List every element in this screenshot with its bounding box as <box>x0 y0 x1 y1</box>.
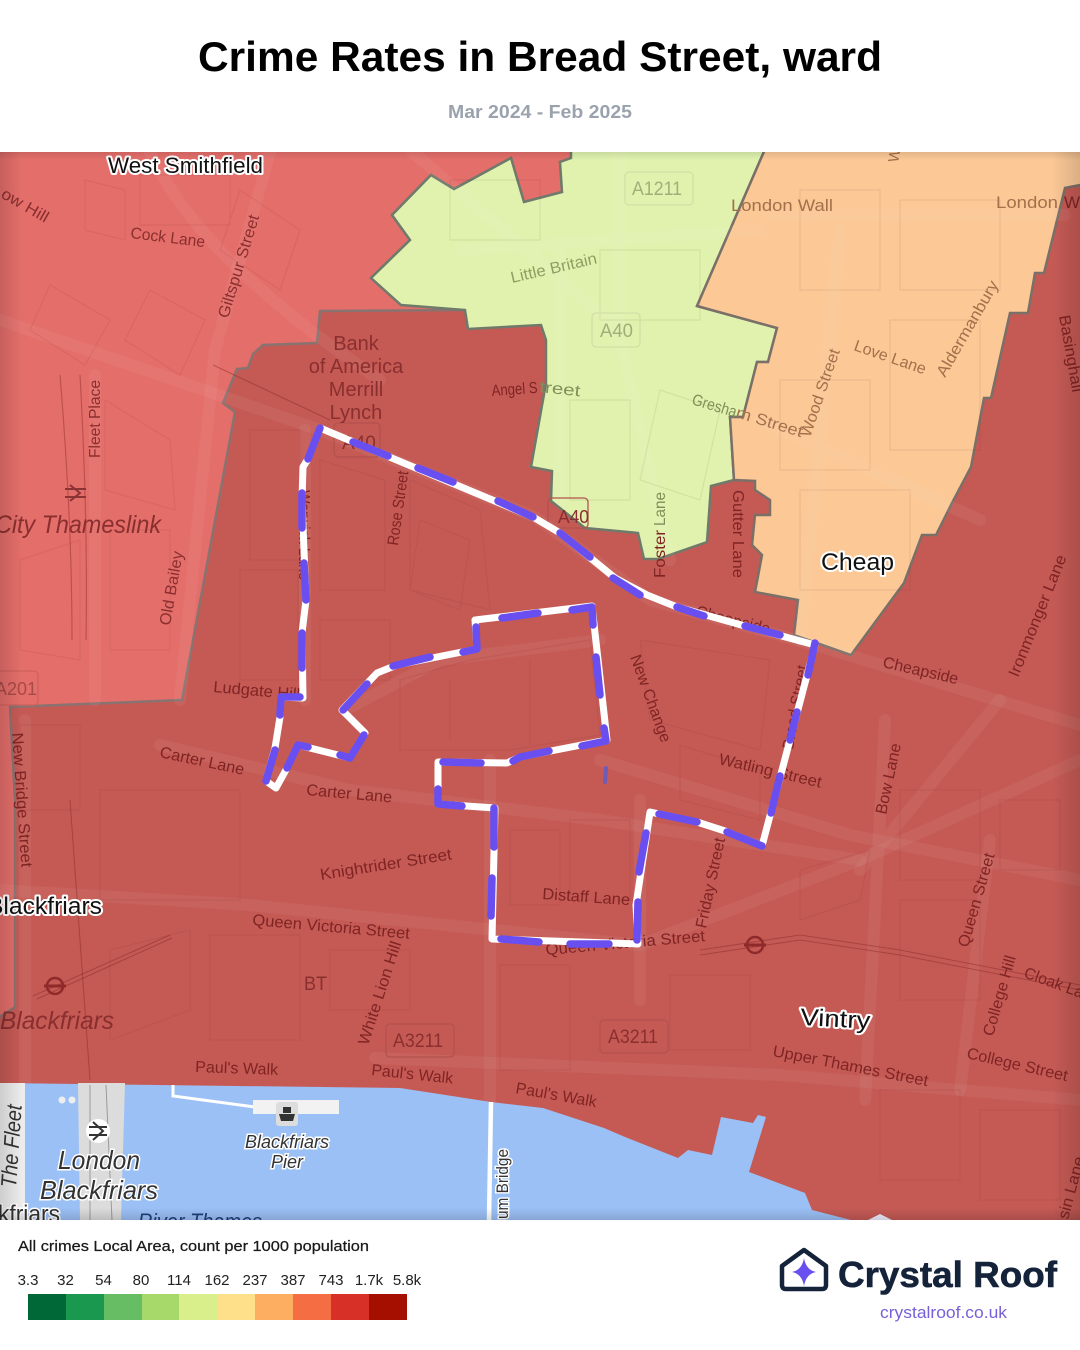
ward region: light green, low crime <box>371 140 777 559</box>
street labels on the map: BT <box>304 974 327 995</box>
street labels on the map: Watling Street <box>717 751 824 792</box>
street labels on the map: City Thameslink <box>0 511 162 539</box>
street labels on the map: Rose Street <box>385 469 412 547</box>
street labels on the map: treet <box>539 379 582 400</box>
street labels on the map <box>0 146 1080 1221</box>
street labels on the map: W <box>885 146 905 164</box>
street labels on the map: W <box>1064 193 1080 212</box>
The Fleet road strip <box>0 1083 25 1223</box>
tube rail lines and station icons <box>33 365 1080 1080</box>
street labels on the map: Ludgate Hill <box>213 679 301 704</box>
legend scale labels: 54 <box>95 1272 112 1289</box>
street labels on the map: Paul's Walk <box>371 1062 455 1088</box>
ward label: West Smithfield: West Smithfield <box>108 153 263 178</box>
street labels on the map: White Lion Hill <box>356 939 405 1047</box>
legend scale labels: 114 <box>167 1272 191 1289</box>
water: River Thames <box>0 1083 851 1220</box>
legend scale labels <box>18 1272 422 1289</box>
street labels on the map: Ironmonger Lane <box>1006 552 1070 679</box>
icon: house with star <box>782 1250 826 1289</box>
street labels on the map: Lynch <box>330 402 382 424</box>
legend scale labels: 387 <box>280 1272 306 1289</box>
Bread Street ward boundary <box>266 428 815 944</box>
street labels on the map: College Hill <box>981 954 1020 1038</box>
ward region: orange, Cheap <box>697 140 1080 655</box>
map edge shading <box>0 152 1080 1220</box>
street labels on the map: Gresha <box>690 392 739 421</box>
street labels on the map: Distaff Lane <box>542 886 631 909</box>
legend scale labels: 1.7k <box>355 1272 384 1289</box>
street labels on the map: Blackfriars <box>0 1007 114 1035</box>
street labels on the map: Cheapside <box>694 603 772 638</box>
street labels on the map: Bank <box>333 333 380 355</box>
legend scale labels: 5.8k <box>393 1272 422 1289</box>
title: Crime Rates in Bread Street, ward <box>198 33 882 80</box>
legend scale labels: 80 <box>133 1272 149 1289</box>
street labels on the map: Knightrider Street <box>319 846 454 884</box>
legend title: All crimes Local Area, count per 1000 population <box>18 1238 369 1255</box>
street labels on the map: m Street <box>734 405 805 441</box>
street labels on the map: Carter Lane <box>158 744 246 779</box>
river side labels <box>0 1104 513 1220</box>
website url: crystalroof.co.uk <box>880 1304 1008 1322</box>
street labels on the map: Aldermanbury <box>934 278 1002 380</box>
street labels on the map: A3211 <box>393 1031 443 1052</box>
street labels on the map: Angel S <box>491 380 538 400</box>
street labels on the map: Fleet Place <box>87 380 104 458</box>
street labels on the map: Foster <box>652 529 669 578</box>
legend scale labels: 237 <box>242 1272 268 1289</box>
river side labels: Pier <box>271 1152 304 1172</box>
street labels on the map: Wood Street <box>798 346 844 439</box>
legend scale labels: 743 <box>318 1272 344 1289</box>
icon: Thameslink rail station <box>65 485 86 501</box>
street labels on the map: College Street <box>965 1045 1070 1085</box>
legend scale labels: 32 <box>57 1272 74 1289</box>
road number signs <box>0 172 693 1057</box>
street labels on the map: Paul's Walk <box>195 1059 279 1079</box>
street labels on the map: Queen Victoria Street <box>545 928 706 959</box>
icon: national rail station <box>86 1119 110 1143</box>
ward label: Vintry: Vintry <box>800 1004 871 1035</box>
street labels on the map: of America <box>309 356 404 378</box>
legend scale labels: 3.3 <box>18 1272 38 1289</box>
street labels on the map: A40 <box>600 321 633 342</box>
street labels on the map: Gutter Lane <box>729 490 746 578</box>
icon: Mansion House underground <box>744 937 766 953</box>
river side labels: um Bridge <box>493 1149 512 1219</box>
boundary: purple dashes <box>266 428 815 944</box>
street labels on the map: A40 <box>558 507 589 527</box>
boundary: white base line <box>266 428 815 944</box>
street labels on the map: Paul's Walk <box>514 1080 599 1111</box>
street labels on the map: Merrill <box>329 379 383 401</box>
street labels on the map: London <box>996 193 1058 212</box>
street labels on the map: Bread Street <box>780 664 812 751</box>
river side labels: Blackfriars <box>245 1132 329 1152</box>
street labels on the map: London Wall <box>731 196 833 215</box>
street labels on the map: New Bridge Street <box>8 732 34 869</box>
street labels on the map: A40 <box>342 433 376 454</box>
ward region: lighter red, north west <box>0 140 571 1020</box>
base map: roads <box>19 257 1006 1096</box>
street labels on the map: Bow Lane <box>873 742 905 816</box>
street labels on the map: Upper Thames Street <box>771 1043 930 1090</box>
icon: Blackfriars underground <box>44 978 66 994</box>
ward region: dark red (Bread Street and neighbours) <box>0 152 1080 1220</box>
street labels on the map: Cheapside <box>881 654 960 688</box>
street labels on the map: Warwick Lane <box>295 490 312 580</box>
street labels on the map: Old Bailey <box>157 550 187 627</box>
street labels on the map: Carter Lane <box>306 782 393 806</box>
wordmark: Crystal Roof <box>838 1254 1058 1295</box>
street labels on the map: A3211 <box>608 1027 658 1048</box>
Blackfriars rail bridge <box>58 1083 125 1220</box>
street labels on the map: Love Lane <box>852 338 928 378</box>
street labels on the map: Lane <box>652 492 669 526</box>
street labels on the map: Queen Victoria Street <box>252 912 411 943</box>
ward label: Cheap: Cheap <box>821 549 894 576</box>
river side labels: London <box>58 1145 140 1175</box>
legend colour bar <box>28 1294 407 1320</box>
river side labels: Blackfriars <box>40 1175 158 1205</box>
pier <box>173 1085 339 1126</box>
subtitle: date range: Mar 2024 - Feb 2025 <box>448 102 632 122</box>
street labels on the map: Queen Street <box>956 851 999 949</box>
base map: building outlines <box>20 175 1060 1200</box>
street labels on the map: New Change <box>626 653 674 745</box>
small white land tip at bottom <box>868 1214 892 1220</box>
street labels on the map: Giltspur Street <box>216 212 263 320</box>
river side labels: River Thames <box>138 1209 262 1234</box>
street labels on the map: Friday Street <box>693 836 729 930</box>
street labels on the map: A1211 <box>632 179 682 200</box>
Millennium Bridge <box>489 1102 491 1220</box>
legend scale labels: 162 <box>204 1272 230 1289</box>
street labels on the map: Cock Lane <box>130 225 206 251</box>
logo: Crystal Roof <box>782 1250 1058 1322</box>
street labels on the map: Little Britain <box>509 251 599 287</box>
